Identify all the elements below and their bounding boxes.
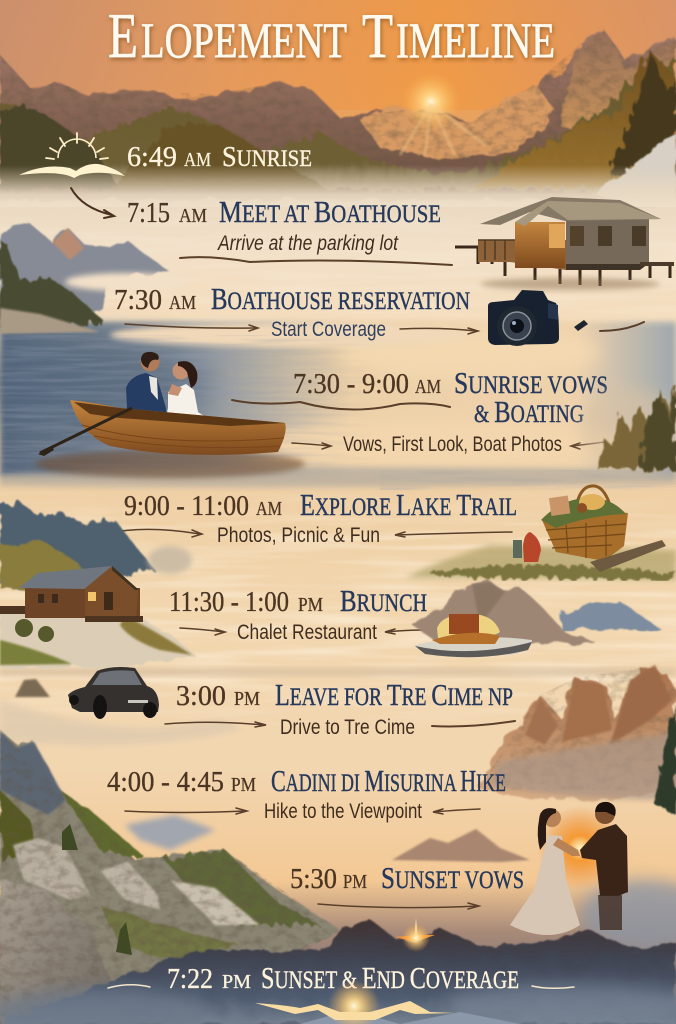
row: cadini di misurina hike: 4:00 - 4:45 bbox=[107, 766, 224, 798]
row: brunch bbox=[169, 583, 427, 644]
row: explore lake trail: 9:00 - 11:00 bbox=[124, 490, 249, 522]
row: brunch: 11:30 - 1:00 bbox=[169, 586, 289, 618]
row: sunrise vows and boating: AM bbox=[415, 376, 441, 398]
icon: dolomite peaks bbox=[480, 665, 676, 815]
icon: mountains behind brunch table bbox=[412, 582, 660, 645]
row: cadini di misurina hike: PM bbox=[231, 774, 256, 796]
icon: couple in rowing boat bbox=[35, 352, 305, 478]
row: sunset vows: 5:30 bbox=[290, 863, 337, 895]
icon: camera and lens cap bbox=[488, 290, 644, 346]
row: leave for tre cime bbox=[165, 677, 515, 739]
row: cadini di misurina hike: CADINI DI MISURINA HIKE bbox=[271, 763, 506, 798]
row: sunrise: AM bbox=[184, 149, 211, 171]
trees: right shore bbox=[580, 385, 676, 472]
row: boathouse reservation: BOATHOUSE RESERVATION bbox=[211, 281, 470, 316]
icon: distant hazy mountain bbox=[392, 829, 530, 862]
icon: glowing sunset ridge bbox=[255, 980, 455, 1024]
row: sunset and end coverage bbox=[108, 960, 574, 995]
row: explore lake trail: EXPLORE LAKE TRAIL bbox=[300, 487, 517, 522]
left mountains by the lake bbox=[0, 224, 185, 334]
woman bbox=[163, 361, 226, 431]
row: sunrise: SUNRISE bbox=[222, 141, 312, 173]
man bbox=[126, 352, 168, 428]
row: boathouse reservation: Start Coverage bbox=[271, 318, 386, 341]
icon: boathouse on stilts bbox=[455, 197, 674, 290]
row: sunrise bbox=[127, 141, 312, 173]
row: sunrise vows and boating: 7:30 - 9:00 bbox=[293, 368, 409, 400]
icon: sunrise over open book bbox=[19, 133, 125, 178]
title: E bbox=[108, 0, 138, 71]
row: sunrise vows and boating: & BOATING bbox=[474, 394, 584, 429]
row: explore lake trail bbox=[115, 487, 517, 547]
row: meet at boathouse: 7:15 bbox=[127, 197, 170, 229]
row: sunrise vows and boating bbox=[232, 365, 608, 456]
row: sunset and end coverage: PM bbox=[222, 971, 251, 993]
row: brunch: BRUNCH bbox=[340, 583, 427, 618]
row: brunch: PM bbox=[298, 594, 323, 616]
title: LOPEMENT bbox=[141, 12, 347, 68]
row: sunset vows: SUNSET VOWS bbox=[381, 860, 524, 895]
arrow: to boathouse bbox=[71, 188, 114, 218]
title bbox=[108, 0, 555, 71]
icon: forested hillside, left bbox=[0, 502, 192, 590]
row: sunset vows bbox=[290, 860, 524, 909]
row: sunrise vows and boating: Vows, First Look, Boat Photos bbox=[343, 433, 562, 456]
row: leave for tre cime: PM bbox=[234, 688, 260, 710]
row: meet at boathouse: AM bbox=[179, 205, 207, 227]
icon: couple at sunset bbox=[510, 802, 676, 951]
row: meet at boathouse: MEET AT BOATHOUSE bbox=[219, 194, 441, 229]
title: IMELINE bbox=[396, 12, 555, 68]
row: leave for tre cime: 3:00 bbox=[176, 680, 226, 712]
row: sunrise vows and boating: SUNRISE VOWS bbox=[454, 365, 608, 400]
row: sunset and end coverage: 7:22 bbox=[167, 963, 213, 995]
footer: dark mountain ridges bbox=[0, 918, 676, 1024]
icon: chalet on the hill bbox=[0, 566, 195, 668]
row: leave for tre cime: Drive to Tre Cime bbox=[280, 716, 415, 739]
row: sunset vows: PM bbox=[343, 871, 367, 893]
row: cadini di misurina hike: Hike to the Viewpoint bbox=[264, 800, 422, 823]
row: brunch: Chalet Restaurant bbox=[237, 621, 377, 644]
groom bbox=[580, 802, 628, 930]
row: meet at boathouse: Arrive at the parking lot bbox=[216, 232, 399, 255]
row: meet at boathouse bbox=[127, 194, 452, 265]
row: leave for tre cime: LEAVE FOR TRE CIME NP bbox=[275, 677, 513, 712]
row: sunset and end coverage: SUNSET & END COVERAGE bbox=[261, 960, 519, 995]
row: explore lake trail: Photos, Picnic & Fun bbox=[217, 524, 380, 547]
icon: car on road bbox=[0, 667, 240, 746]
icon: picnic basket on shore bbox=[405, 486, 676, 580]
bride bbox=[510, 808, 580, 935]
row: explore lake trail: AM bbox=[256, 498, 282, 520]
mountains: sunrise range bbox=[0, 30, 676, 208]
row: boathouse reservation bbox=[114, 281, 478, 341]
icon: rocky mountains, lower left bbox=[0, 730, 340, 1024]
row: boathouse reservation: AM bbox=[169, 292, 196, 314]
row: boathouse reservation: 7:30 bbox=[114, 284, 162, 316]
row: sunrise: 6:49 bbox=[127, 141, 177, 173]
row: cadini di misurina hike bbox=[107, 763, 506, 823]
title: T bbox=[362, 0, 393, 71]
icon: brunch table bbox=[415, 614, 532, 657]
